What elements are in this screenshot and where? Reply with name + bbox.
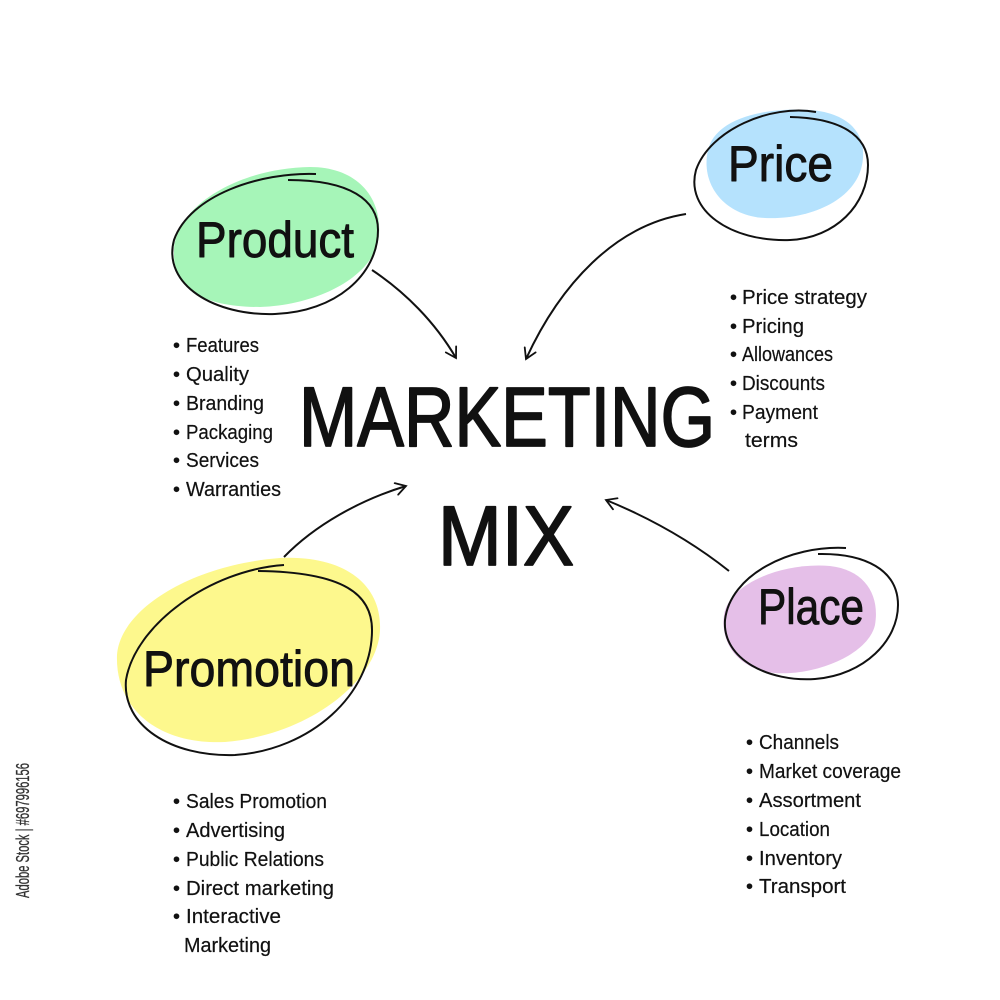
- promotion list: Direct marketing: [186, 878, 334, 900]
- arrow: promotion to title: [284, 486, 406, 557]
- arrow: product to title: [372, 270, 456, 358]
- panel: price: [694, 110, 868, 452]
- product list: Services: [186, 450, 259, 472]
- place list: Assortment: [759, 790, 861, 812]
- promotion list: Sales Promotion: [186, 791, 327, 813]
- panel: place: [723, 548, 901, 898]
- title: [299, 370, 715, 583]
- place colour blob: [723, 566, 876, 673]
- place list: Channels: [759, 732, 839, 754]
- product colour blob: [174, 167, 379, 307]
- place list: •: [746, 876, 753, 898]
- price list: Discounts: [742, 373, 825, 395]
- promotion heading: Promotion: [143, 641, 355, 697]
- price list: Payment: [742, 402, 818, 424]
- panel: product: [172, 167, 379, 501]
- place list: Market coverage: [759, 761, 901, 783]
- promotion colour blob: [117, 558, 380, 742]
- place list: Transport: [759, 876, 846, 898]
- price list: •: [730, 402, 737, 424]
- price list: Pricing: [742, 316, 804, 338]
- place list: Inventory: [759, 848, 842, 870]
- product list: •: [173, 422, 180, 444]
- price heading: Price: [728, 136, 833, 192]
- place heading: Place: [758, 579, 864, 635]
- price colour blob: [707, 110, 863, 218]
- place list: •: [746, 761, 753, 783]
- price list: •: [730, 344, 737, 366]
- arrow: price to title: [526, 214, 686, 359]
- promotion list: •: [173, 849, 180, 871]
- price list: •: [730, 316, 737, 338]
- promotion list: Marketing: [184, 935, 271, 957]
- promotion list: •: [173, 820, 180, 842]
- place outline: [725, 548, 898, 679]
- place list: •: [746, 790, 753, 812]
- product list: Packaging: [186, 422, 273, 444]
- title: MIX: [438, 489, 574, 583]
- product list: •: [173, 479, 180, 501]
- promotion list: •: [173, 878, 180, 900]
- promotion list: [173, 791, 334, 957]
- price list: Price strategy: [742, 287, 867, 309]
- arrow: place to title: [606, 500, 729, 571]
- price list: Allowances: [742, 344, 833, 366]
- product list: •: [173, 393, 180, 415]
- price outline: [694, 111, 868, 240]
- title: MARKETING: [299, 370, 715, 464]
- price list: [730, 287, 867, 452]
- promotion list: •: [173, 791, 180, 813]
- place list: •: [746, 732, 753, 754]
- product list: [173, 335, 281, 501]
- promotion list: Public Relations: [186, 849, 324, 871]
- place list: •: [746, 848, 753, 870]
- place list: Location: [759, 819, 830, 841]
- product list: Quality: [186, 364, 249, 386]
- product list: •: [173, 364, 180, 386]
- product heading: Product: [196, 212, 354, 268]
- price list: terms: [745, 430, 798, 452]
- product outline: [172, 174, 378, 314]
- panel: promotion: [117, 558, 380, 957]
- price list: •: [730, 373, 737, 395]
- product list: Warranties: [186, 479, 281, 501]
- promotion list: Advertising: [186, 820, 285, 842]
- place list: [746, 732, 901, 898]
- product list: •: [173, 335, 180, 357]
- promotion outline: [126, 565, 372, 755]
- promotion list: •: [173, 906, 180, 928]
- promotion list: Interactive: [186, 906, 281, 928]
- side credit: Adobe Stock | #697996156: [13, 763, 33, 898]
- product list: Features: [186, 335, 259, 357]
- product list: Branding: [186, 393, 264, 415]
- price list: •: [730, 287, 737, 309]
- place list: •: [746, 819, 753, 841]
- product list: •: [173, 450, 180, 472]
